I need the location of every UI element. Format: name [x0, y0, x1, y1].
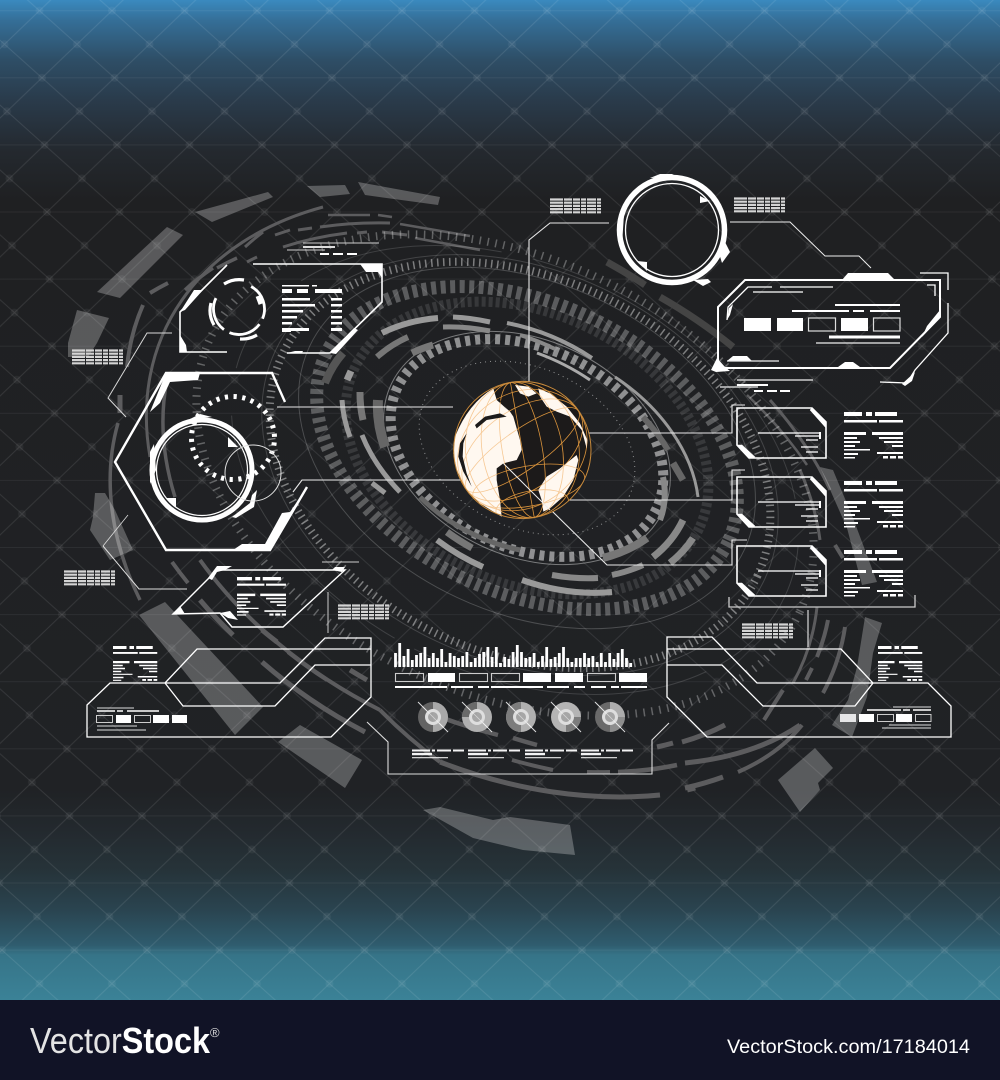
panel: bottom right	[667, 637, 951, 737]
globe	[453, 380, 592, 520]
logo: VectorStock	[30, 1020, 211, 1061]
bottom centre rectangle row	[395, 673, 647, 687]
rect row	[116, 715, 187, 723]
panel: hexagon dial	[115, 373, 307, 550]
connector left	[108, 333, 172, 417]
connector top right	[730, 222, 871, 268]
rect row	[840, 714, 912, 722]
continent coast shadows	[458, 392, 513, 487]
core hatched rings	[265, 223, 789, 673]
globe wireframe	[459, 382, 588, 518]
right panel stack	[729, 408, 915, 647]
panel: top right	[711, 273, 948, 391]
rectangle row	[744, 318, 868, 331]
continents	[453, 385, 587, 517]
footer	[0, 1000, 1000, 1080]
fine tick rings	[118, 140, 892, 810]
bottom centre bar chart	[396, 643, 631, 667]
outer orbit arcs	[110, 207, 845, 797]
text block	[282, 285, 342, 332]
top right gauge ring	[618, 174, 730, 286]
panel: top left	[180, 243, 382, 354]
dials	[418, 702, 625, 732]
label blocks	[64, 198, 793, 637]
image id: VectorStock.com/17184014	[727, 1036, 970, 1058]
bottom centre bracket	[367, 722, 669, 774]
panel: bottom left	[87, 638, 371, 737]
bottom centre notes	[412, 750, 633, 758]
connector lines from globe	[277, 223, 747, 565]
registered mark: ®	[210, 1025, 220, 1040]
ring dial	[204, 274, 274, 344]
outer grey arc segments	[68, 182, 882, 855]
parallelogram panel	[103, 515, 359, 633]
grey ring segments	[325, 317, 698, 593]
